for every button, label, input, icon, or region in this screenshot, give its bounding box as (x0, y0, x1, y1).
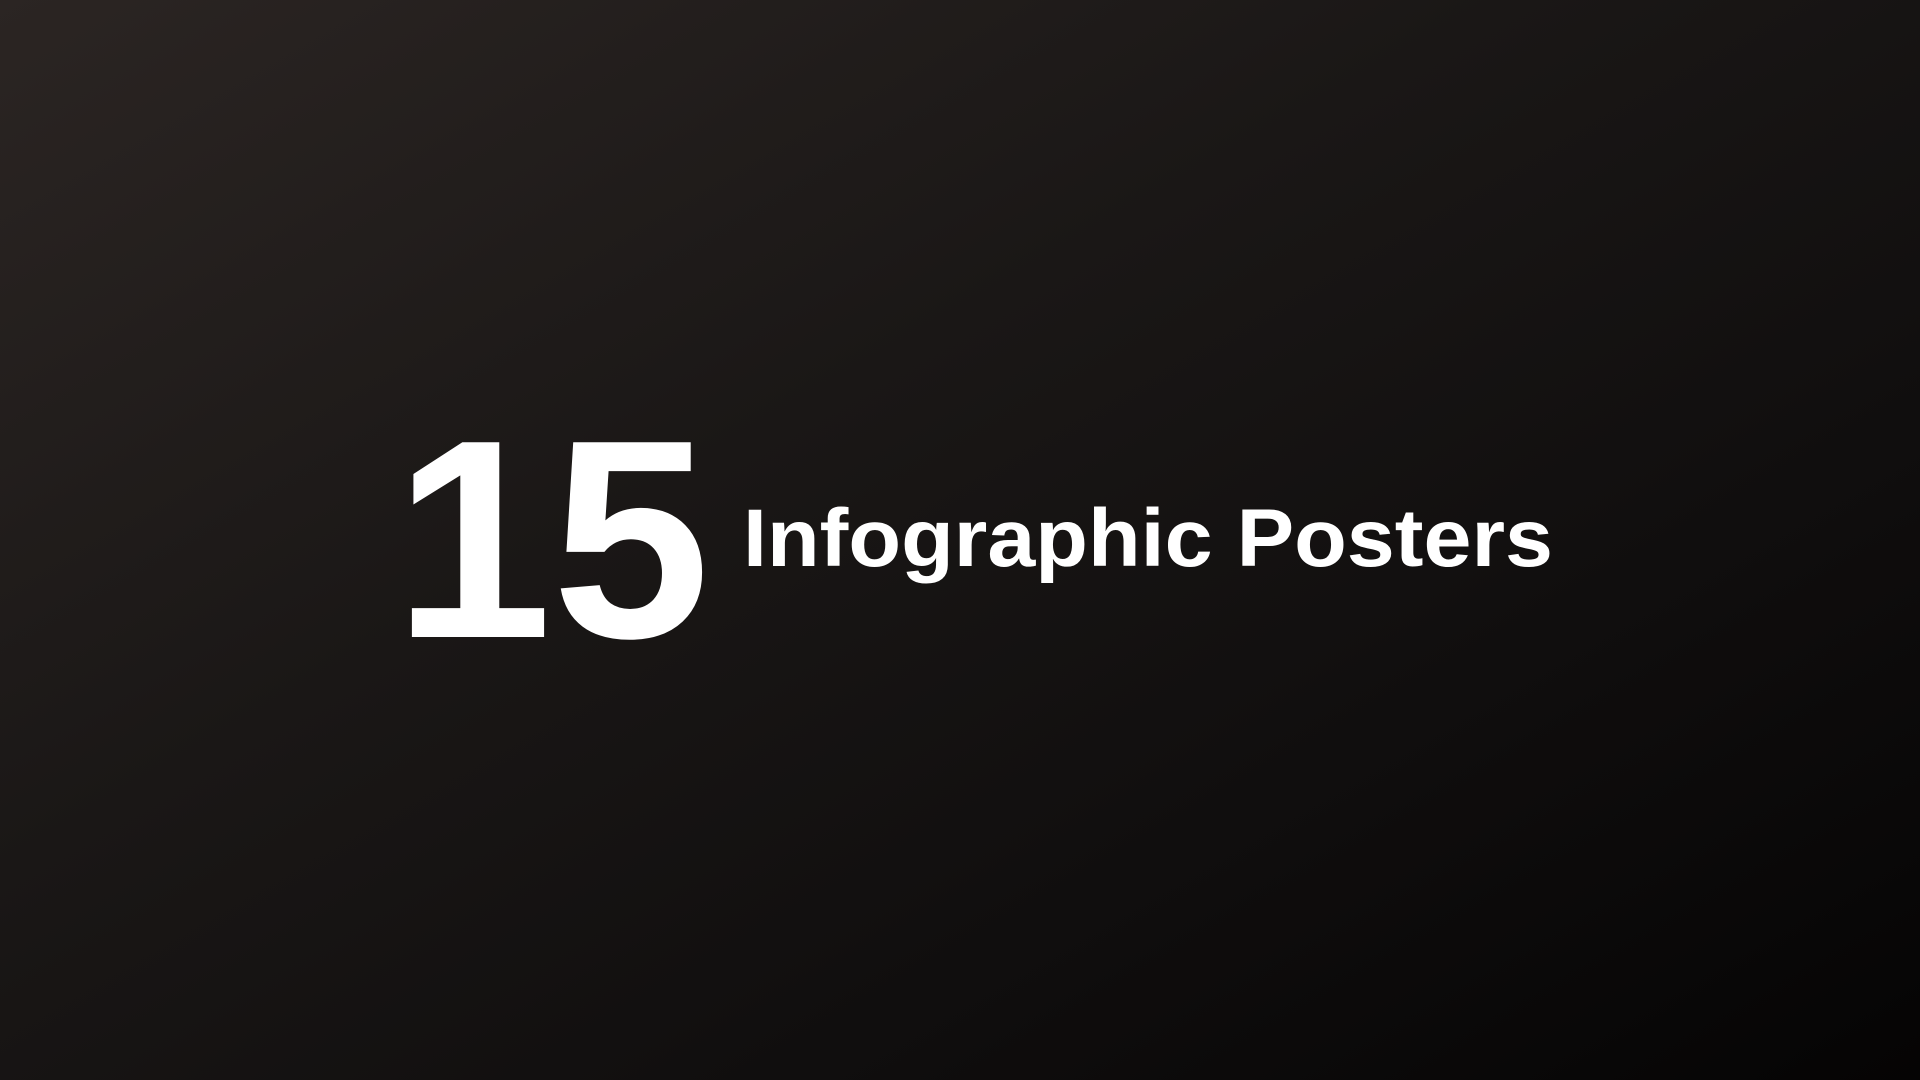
title: Infographic Posters: Infographic Posters (743, 493, 1553, 584)
title: number 15: 15 (394, 381, 710, 697)
